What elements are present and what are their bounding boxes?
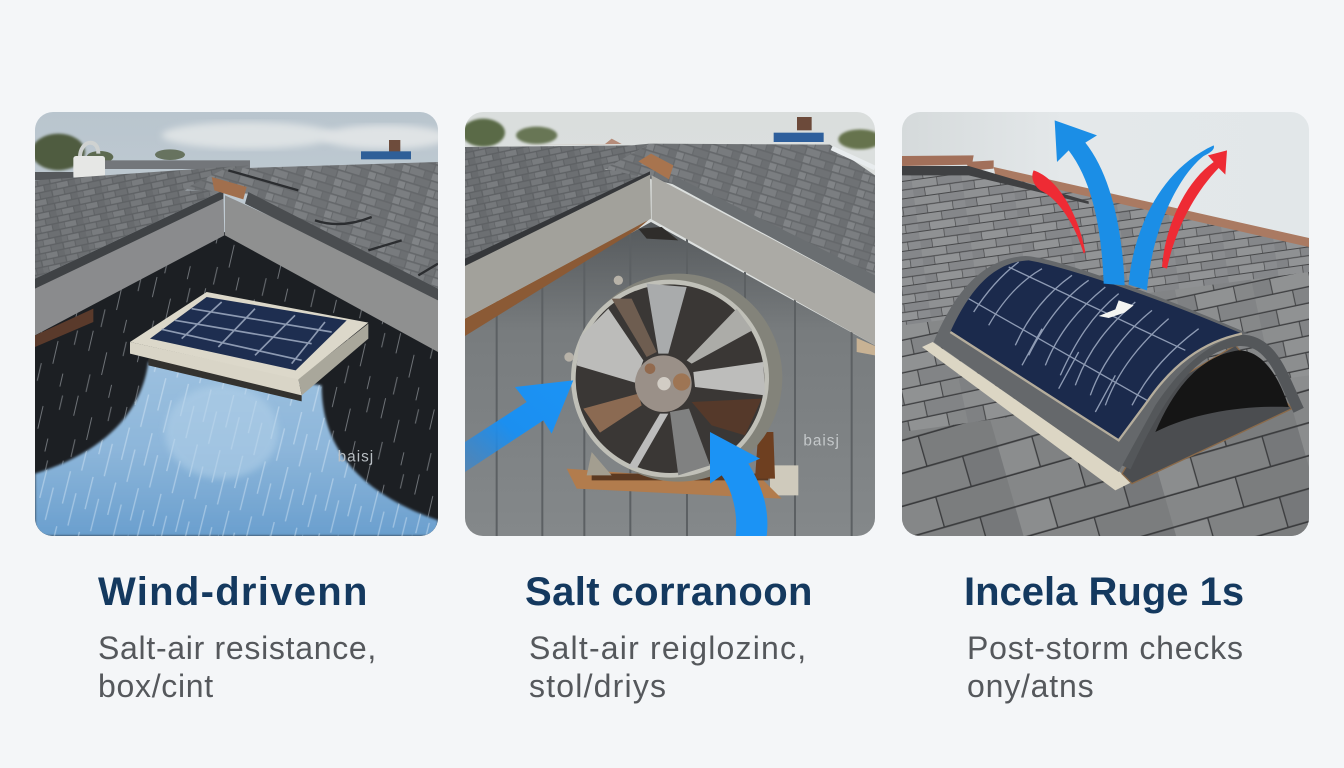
- text: post-storm description: Post-storm checks: [967, 630, 1244, 666]
- text: wind-driven description: Salt-air resistance,: [98, 630, 377, 666]
- gable fascia boards: [465, 154, 875, 355]
- arrow: blue center: [1055, 120, 1125, 285]
- heading: third column: Incela Ruge 1s: [964, 570, 1244, 614]
- right roof: [605, 144, 875, 282]
- watermark: baisj: [338, 448, 374, 465]
- shingle roof: [902, 171, 1309, 536]
- domed solar vent: [922, 256, 1299, 490]
- plank wall: [465, 222, 875, 536]
- left roof: [465, 144, 650, 260]
- heading: salt corrosion: Salt corranoon: [525, 570, 813, 614]
- corroded fan: [564, 274, 782, 482]
- solar vent panel: [130, 292, 368, 401]
- text: salt corrosion description: [529, 630, 807, 704]
- text: wind-driven description: box/cint: [98, 668, 214, 704]
- background trees and chimney: [462, 117, 882, 149]
- arrow: blue right: [1129, 145, 1214, 290]
- illustrated photo panels: [35, 112, 1309, 536]
- panel: salt corrosion photo: [462, 112, 882, 536]
- glass surface: [934, 256, 1249, 472]
- right roof: [183, 162, 438, 289]
- text: salt corrosion description: stol/driys: [529, 668, 667, 704]
- background trees and roof vent: [32, 134, 411, 180]
- gable fascia boards: [35, 177, 438, 352]
- panel: solar vent photo: [902, 112, 1309, 536]
- water flow: [35, 362, 438, 536]
- left roof: [35, 165, 248, 279]
- watermark: baisj: [803, 432, 840, 449]
- rusted mounting bracket: [567, 432, 798, 499]
- wall: [35, 232, 438, 536]
- heading: wind-driven: Wind-drivenn: [98, 570, 369, 614]
- roof ridge trim: [902, 155, 1309, 247]
- arrow: red right: [1162, 150, 1227, 269]
- text: wind-driven description: [98, 630, 377, 704]
- arrow: inflow left: [465, 380, 573, 472]
- text: salt corrosion description: Salt-air reiglozinc,: [529, 630, 807, 666]
- arrow: inflow bottom: [710, 432, 767, 536]
- text: post-storm description: ony/atns: [967, 668, 1094, 704]
- panel: wind-driven rain photo: [32, 112, 448, 536]
- arrow: red left: [1032, 170, 1085, 254]
- text: post-storm description: [967, 630, 1244, 704]
- base plate and shadow: [922, 342, 1142, 490]
